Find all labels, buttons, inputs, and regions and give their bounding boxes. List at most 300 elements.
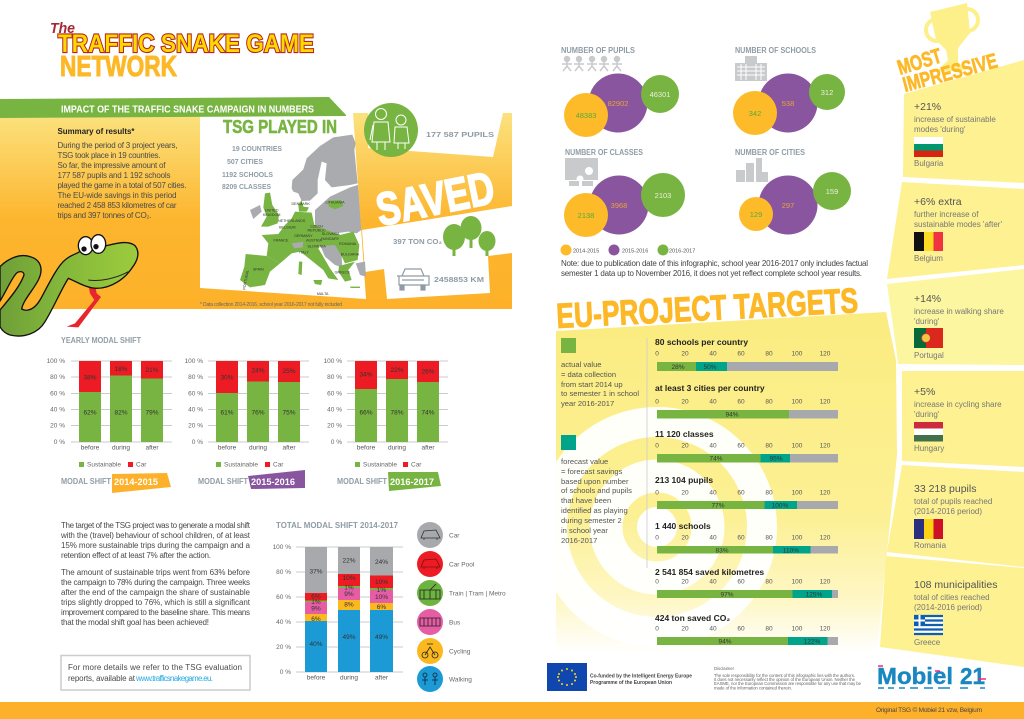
chart: modal shift 2016-2017: 0 % (331, 439, 342, 446)
panel: Greece: total of cities reached (914, 593, 990, 602)
map of Europe: AUSTRIA (306, 239, 322, 243)
label: modal shift 2016-2017: 2016-2017 (390, 477, 434, 487)
chart: modal shift 2015-2016: 76% (251, 410, 265, 416)
bar: at least 3 cities per country: 60 (737, 398, 745, 406)
chart: modal shift 2016-2017: 20 % (327, 422, 342, 430)
label: modal shift 2014-2015: 2014-2015 (114, 477, 158, 487)
bar: at least 3 cities per country: 20 (681, 398, 689, 406)
panel: Belgium: +6% extra (914, 196, 962, 208)
chart: modal shift 2015-2016: 24% (251, 368, 265, 374)
panel: number of classes: 2103 (655, 191, 671, 200)
bar: 80 schools per country: 80 schools per country (655, 337, 748, 347)
legend: actual value (561, 338, 639, 408)
panel: Belgium: further increase of (914, 210, 979, 219)
text block: summary of results: reached 2 458 853 kilometres of car (58, 201, 177, 210)
chart: modal shift 2016-2017: 22% (390, 367, 404, 374)
text block: summary of results: The EU-wide savings in this period (58, 191, 176, 200)
chart: modal shift 2014-2015: Sustainable (87, 462, 121, 468)
stat: km saved: 2458853 KM (434, 275, 484, 284)
chart: modal shift 2016-2017: 60 % (327, 390, 342, 398)
chart: total modal shift: 9% (344, 591, 354, 598)
text: co-funded (590, 674, 692, 686)
legend: school years (560, 244, 695, 256)
map of Europe: NETHERLANDS (278, 219, 306, 223)
bar: 2 541 854 saved kilometres: 20 (681, 578, 689, 586)
text: co-funded: Co-funded by the Intelligent Energy Europe (590, 674, 692, 680)
panel: Hungary (902, 371, 1024, 467)
panel: Romania (887, 465, 1024, 567)
chart: modal shift 2014-2015: 80 % (50, 374, 65, 381)
bar: 424 ton saved CO2: 122% (804, 638, 821, 646)
panel: Greece (880, 556, 1024, 667)
icon: flag of Greece (914, 615, 943, 635)
legend: forecast value (561, 435, 632, 545)
chart: total modal shift: after (375, 674, 389, 682)
legend: actual value: to semester 1 in school (561, 389, 639, 398)
note: publication date: Note: due to publication date of this infographic, school year 2016-2017 only includes factual (561, 259, 868, 268)
bar: 11 120 classes: 60 (737, 442, 745, 450)
bar: 1 440 schools (655, 521, 838, 554)
legend: forecast value: = forecast savings (561, 467, 623, 476)
panel: number of pupils: 48383 (576, 111, 596, 120)
panel: Romania: 33 218 pupils (914, 483, 976, 495)
chart: modal shift 2016-2017: 40 % (327, 406, 342, 414)
map of Europe: LITHUANIA (325, 201, 345, 205)
bar: 424 ton saved CO2: 80 (765, 626, 773, 632)
chart: total modal shift: 6% (311, 616, 321, 623)
chart: modal shift 2014-2015: 21% (145, 367, 159, 374)
map of Europe: ITALY (299, 251, 309, 255)
legend: school years: 2015-2016 (622, 248, 648, 254)
chart: modal shift 2015-2016: 61% (220, 410, 234, 416)
icon: walking mode (417, 666, 472, 692)
label: modal shift 2016-2017: MODAL SHIFT (337, 477, 387, 486)
icon: city skyline (736, 158, 768, 182)
label: modal shift 2016-2017 (337, 472, 441, 491)
chart: total modal shift: 37% (309, 568, 323, 576)
panel: number of schools: 342 (749, 109, 761, 118)
icon: trophy (926, 3, 978, 72)
target bars (647, 337, 838, 646)
stats list: 8209 CLASSES (222, 182, 271, 191)
text: disclaimer: The sole responsibility for the content of this infographic lies with the authors. (714, 673, 855, 678)
legend: actual value: = data collection (561, 370, 616, 379)
heading: most impressive: MOST (895, 45, 945, 80)
chart: total modal shift: 10% (375, 594, 388, 601)
bar: 213 104 pupils: 120 (820, 490, 831, 496)
chart: total modal shift: 49% (342, 634, 356, 641)
chart: modal shift 2016-2017: 26% (421, 368, 435, 376)
icon: flag of Portugal (914, 328, 943, 348)
heading: saved: SAVED (372, 161, 499, 236)
label: modal shift 2014-2015: MODAL SHIFT (61, 477, 111, 486)
panel: Bulgaria: Bulgaria (914, 159, 944, 168)
panel: number of schools: 312 (821, 88, 833, 97)
map of Europe: GREECE (335, 270, 351, 274)
panel: Greece: (2014-2016 period) (914, 603, 982, 612)
text block: project target: The target of the TSG project was to generate a modal shift (61, 521, 251, 530)
bar: 213 104 pupils: 80 (765, 490, 773, 496)
chart: modal shift 2014-2015: 79% (145, 410, 159, 416)
bar: 11 120 classes: 0 (655, 442, 659, 450)
map of Europe: ROMANIA (339, 242, 357, 246)
bar: 2 541 854 saved kilometres: 2 541 854 saved kilometres (655, 567, 764, 577)
text block: summary of results: Summary of results* (58, 127, 135, 136)
chart: modal shift 2016-2017 (324, 358, 448, 468)
bar: 80 schools per country: 120 (820, 350, 831, 358)
chart: modal shift 2015-2016: 60 % (188, 390, 203, 398)
chart: modal shift 2016-2017: 34% (359, 372, 373, 378)
bar: 11 120 classes: 120 (820, 442, 831, 450)
bar: 1 440 schools: 80 (765, 534, 773, 542)
chart: modal shift 2015-2016: 100 % (185, 358, 203, 365)
bar: 424 ton saved CO2: 0 (655, 626, 659, 632)
note: publication date (561, 259, 868, 278)
panel: Hungary: Hungary (914, 444, 944, 453)
chart: modal shift 2014-2015: 20 % (50, 422, 65, 430)
chart: total modal shift: 40 % (276, 619, 291, 626)
bar: 1 440 schools: 20 (681, 534, 689, 542)
bar: 80 schools per country (655, 337, 838, 371)
map of Europe: CZECH (310, 224, 323, 228)
panel: number of cities: 159 (826, 187, 838, 196)
chart: modal shift 2015-2016 (185, 358, 309, 468)
icon: car mode (417, 522, 460, 548)
chart: total modal shift: 80 % (276, 569, 291, 576)
bar: 2 541 854 saved kilometres: 80 (765, 578, 773, 586)
bar: 80 schools per country: 40 (709, 350, 717, 358)
legend: forecast value: of schools and pupils (561, 486, 632, 495)
icon: school building (735, 56, 767, 81)
chart: total modal shift: 20 % (276, 644, 291, 651)
logo: Mobiel 21: Mobiel (877, 663, 953, 689)
bar: 2 541 854 saved kilometres: 100 (792, 578, 803, 586)
bar: 213 104 pupils: 60 (737, 490, 745, 496)
bar: 11 120 classes: 95% (769, 456, 783, 462)
chart: modal shift 2014-2015: 40 % (50, 406, 65, 414)
chart: total modal shift: 10% (342, 575, 356, 582)
icon: paper-chain children (562, 56, 622, 71)
panel: Portugal (887, 269, 1024, 365)
text: disclaimer: EASME, nor the European Commission are responsible for any use that may be (714, 681, 862, 686)
stats list: 1192 SCHOOLS (222, 170, 273, 179)
chart: modal shift 2014-2015: 100 % (47, 358, 65, 365)
chart: total modal shift: 1% (311, 599, 321, 606)
chart: modal shift 2016-2017: 80 % (327, 374, 342, 381)
bar: 2 541 854 saved kilometres: 120 (820, 578, 831, 586)
panel: number of classes (564, 148, 685, 237)
panel: number of schools: NUMBER OF SCHOOLS (735, 46, 817, 55)
bar: at least 3 cities per country: at least 3 cities per country (655, 383, 765, 393)
snake illustration (0, 235, 138, 336)
chart: total modal shift: 0 % (280, 669, 291, 676)
legend: forecast value: during semester 2 (561, 516, 622, 525)
chart: modal shift 2016-2017: Sustainable (363, 462, 397, 468)
chart: modal shift 2016-2017: 100 % (324, 358, 342, 365)
panel: number of pupils: 82902 (608, 99, 628, 108)
label: modal shift 2015-2016: 2015-2016 (251, 477, 295, 487)
map of Europe: DENMARK (292, 202, 310, 206)
chart: total modal shift: 6% (377, 604, 386, 611)
bar: 80 schools per country: 28% (671, 364, 685, 371)
map of Europe: UNITED (265, 209, 279, 213)
chart: modal shift 2015-2016: Sustainable (224, 462, 258, 468)
bar: 1 440 schools: 1 440 schools (655, 521, 711, 531)
chart: modal shift 2015-2016: 80 % (188, 374, 203, 381)
bar: 424 ton saved CO2 (655, 613, 838, 646)
bar: 11 120 classes: 11 120 classes (655, 429, 714, 439)
bar: 424 ton saved CO2: 20 (681, 626, 689, 632)
chart: modal shift 2014-2015: Car (136, 462, 147, 468)
chart: modal shift 2016-2017: 66% (359, 410, 373, 416)
bar: at least 3 cities per country: 40 (709, 398, 717, 406)
panel: Bulgaria: increase of sustainable (914, 115, 996, 124)
map of Europe: BULGARIA (341, 253, 360, 257)
bar: 1 440 schools: 40 (709, 534, 717, 542)
chart: modal shift 2016-2017: after (421, 444, 435, 452)
chart: total modal shift: 49% (375, 634, 388, 641)
stats list: 507 CITIES (227, 157, 263, 166)
bar: at least 3 cities per country: 94% (725, 412, 739, 418)
legend: school years: 2016-2017 (669, 248, 695, 254)
icon: classroom (565, 158, 598, 186)
bar: 213 104 pupils: 40 (709, 490, 717, 496)
icon: train mode (417, 580, 506, 606)
chart: total modal shift: before (307, 674, 326, 682)
icon: car mode: Car (449, 532, 460, 540)
bar: 213 104 pupils: 0 (655, 490, 659, 496)
panel: Portugal: +14% (914, 293, 941, 305)
bar: 213 104 pupils: 213 104 pupils (655, 475, 713, 485)
bar: 2 541 854 saved kilometres: 125% (806, 592, 823, 598)
legend: school years: 2014-2015 (573, 248, 599, 254)
label: modal shift 2015-2016 (198, 470, 305, 489)
bar: 424 ton saved CO2: 424 ton saved CO₂ (655, 613, 730, 623)
title: The (50, 20, 75, 37)
icon: flag of Bulgaria (914, 137, 943, 157)
text block: summary of results: played the game in a total of 507 cities. (58, 181, 186, 190)
chart: modal shift 2014-2015: 62% (83, 410, 97, 416)
panel: Greece: Greece (914, 638, 941, 647)
icon: pupils in green circle (364, 103, 418, 157)
chart: total modal shift: 1% (344, 584, 354, 592)
chart: total modal shift (273, 544, 403, 682)
bar: 80 schools per country: 60 (737, 350, 745, 358)
legend: forecast value: 2016-2017 (561, 536, 597, 545)
chart: modal shift 2016-2017: Car (411, 462, 422, 468)
text block: project target (60, 521, 251, 627)
map of Europe: SLOVENIA (308, 245, 326, 249)
panel: Hungary: increase in cycling share (914, 400, 1002, 409)
icon: EU flag (547, 663, 587, 691)
chart: modal shift 2014-2015: 38% (83, 374, 97, 382)
text block: project target: 15% more sustainable trips during the campaign and a (61, 541, 251, 550)
chart: modal shift 2015-2016: Car (273, 462, 284, 468)
text: disclaimer (714, 666, 862, 690)
map of Europe (240, 135, 366, 296)
heading: TSG played in: TSG PLAYED IN (223, 117, 337, 137)
chart: total modal shift: 40% (309, 641, 323, 648)
icon: car pool mode (417, 551, 475, 577)
legend: forecast value: that have been (561, 496, 611, 505)
panel: number of classes: 2138 (578, 211, 594, 220)
map of Europe: SPAIN (253, 267, 264, 271)
bar: 2 541 854 saved kilometres: 60 (737, 578, 745, 586)
text block: project target: improvement compared to the baseline share. This means (61, 608, 250, 617)
chart: modal shift 2015-2016: 25% (282, 368, 296, 375)
chart: total modal shift: 24% (375, 559, 388, 566)
panel: number of schools (733, 46, 845, 135)
icon: flag of Belgium (914, 232, 943, 251)
text block: project target: that the modal shift goal has been achieved! (61, 618, 209, 627)
chart: modal shift 2015-2016: 0 % (192, 439, 203, 446)
bottom band (0, 702, 1024, 719)
panel: Bulgaria: +21% (914, 101, 941, 113)
panel: Belgium (887, 182, 1024, 279)
chart: modal shift 2014-2015: 60 % (50, 390, 65, 398)
legend: forecast value: identified as playing (561, 506, 628, 515)
panel: number of cities: NUMBER OF CITIES (735, 148, 806, 157)
text block: summary of results (58, 127, 186, 220)
heading: EU-project targets: EU-PROJECT TARGETS (555, 281, 859, 336)
text: disclaimer: It does not necessarily reflect the opinion of the European Union. Neither the (714, 677, 856, 682)
bar: 80 schools per country: 0 (655, 350, 659, 358)
heading: total modal shift: TOTAL MODAL SHIFT 2014-2017 (276, 520, 398, 530)
icon: bus mode: Bus (449, 620, 461, 626)
chart: modal shift 2015-2016: 40 % (188, 406, 203, 414)
chart: modal shift 2014-2015: 0 % (54, 439, 65, 446)
text block: summary of results: During the period of 3 project years, (58, 141, 178, 150)
bar: 80 schools per country: 80 (765, 350, 773, 358)
icon: car (397, 269, 429, 290)
bar: 80 schools per country: 100 (792, 350, 803, 358)
heading: yearly modal shift: YEARLY MODAL SHIFT (61, 336, 141, 345)
panel: Portugal: 'during' (914, 317, 940, 326)
logo: Mobiel 21: 21 (960, 663, 985, 689)
callout: more details: For more details we refer to the TSG evaluation (68, 663, 242, 672)
text block: summary of results: So far, the impressive amount of (58, 161, 166, 170)
title (50, 20, 314, 83)
chart: modal shift 2014-2015: before (81, 444, 100, 452)
chart: modal shift 2015-2016: 20 % (188, 422, 203, 430)
bar: 80 schools per country: 50% (703, 364, 717, 371)
icon: bus mode (417, 609, 461, 635)
bar: 424 ton saved CO2: 100 (792, 626, 803, 632)
bar: 1 440 schools: 60 (737, 534, 745, 542)
text block: project target: trips slightly dropped to 76%, which is still a significant (61, 598, 251, 607)
chart: modal shift 2015-2016: during (249, 444, 267, 452)
text: disclaimer: made of the information contained therein. (714, 686, 792, 690)
stats list: 19 COUNTRIES (232, 144, 282, 153)
text block: project target: after the end of the campaign the share of sustainable (61, 588, 251, 597)
icon: flag of Hungary (914, 422, 943, 442)
panel: number of schools: 538 (782, 99, 794, 108)
panel: Hungary: 'during' (914, 410, 940, 419)
panel: number of cities: 129 (750, 210, 762, 219)
map of Europe: FRANCE (273, 239, 289, 243)
panel: Greece: 108 municipalities (914, 579, 997, 591)
label: modal shift 2015-2016: MODAL SHIFT (198, 477, 248, 486)
text block: project target: the campaign to 78% during the campaign. Three weeks (61, 578, 250, 587)
chart: modal shift 2016-2017: 78% (390, 410, 404, 416)
chart: modal shift 2015-2016: 30% (220, 374, 234, 382)
bar: 80 schools per country: 20 (681, 350, 689, 358)
bar: 11 120 classes: 100 (792, 442, 803, 450)
footnote: * Data collection 2014-2016, school year 2016-2017 not fully included (200, 302, 342, 308)
callout: more details (61, 656, 250, 690)
title: NETWORK (60, 51, 177, 83)
bar: at least 3 cities per country: 120 (820, 398, 831, 406)
bar: 213 104 pupils: 20 (681, 490, 689, 496)
callout: more details: www.trafficsnakegame.eu. (135, 674, 213, 683)
chart: modal shift 2014-2015: after (145, 444, 159, 452)
stat: CO2 saved: 397 TON CO₂ (393, 237, 442, 246)
map of Europe: KINGDOM (263, 213, 280, 217)
legend: forecast value: forecast value (561, 457, 608, 466)
panel: Bulgaria: modes 'during' (914, 125, 966, 134)
bar: 11 120 classes: 40 (709, 442, 717, 450)
panel: number of classes: 3968 (611, 201, 627, 210)
bar: 11 120 classes: 74% (709, 456, 723, 462)
text block: summary of results: trips and 397 tonnes of CO₂. (58, 211, 152, 220)
bar: 2 541 854 saved kilometres: 97% (720, 592, 734, 598)
text block: summary of results: TSG took place in 19 countries. (58, 151, 160, 160)
chart: total modal shift: 8% (344, 602, 354, 608)
chart: total modal shift: 1% (377, 587, 386, 594)
bar: at least 3 cities per country: 80 (765, 398, 773, 406)
bar: 213 104 pupils (655, 475, 838, 510)
panel: number of cities: 297 (782, 201, 794, 210)
bar: 424 ton saved CO2: 40 (709, 626, 717, 632)
icon: cycling mode (417, 638, 471, 664)
icon: walking mode: Walking (449, 676, 472, 684)
bar: at least 3 cities per country: 0 (655, 398, 659, 406)
icon: trees (443, 216, 496, 256)
panel: number of pupils: 46301 (650, 90, 670, 99)
map of Europe: PORTUGAL (242, 270, 250, 290)
panel: Romania: Romania (914, 541, 947, 550)
chart: total modal shift: 100 % (273, 544, 291, 551)
chart: modal shift 2014-2015: 82% (114, 410, 128, 416)
legend: actual value: from start 2014 up (561, 380, 623, 389)
panel: Hungary: +5% (914, 386, 935, 398)
stat: pupils: 177 587 PUPILS (426, 130, 494, 139)
bar: 2 541 854 saved kilometres (655, 567, 838, 598)
bar: 213 104 pupils: 77% (711, 502, 725, 510)
bar: at least 3 cities per country: 100 (792, 398, 803, 406)
panel: Portugal: Portugal (914, 351, 944, 360)
text: co-funded: Programme of the European Union (590, 680, 673, 686)
panel: Bulgaria (903, 60, 1024, 183)
bottom band: Original TSG © Mobiel 21 vzw, Belgium (876, 706, 982, 714)
panel: Belgium: sustainable modes 'after' (914, 220, 1002, 229)
map of Europe: GERMANY (294, 234, 313, 238)
text block: project target: retention effect of at least 7% after the action. (61, 551, 211, 560)
bar: 1 440 schools: 0 (655, 534, 659, 542)
logo: Mobiel 21 (877, 663, 986, 689)
chart: total modal shift: during (340, 674, 358, 682)
map of Europe: MALTA (317, 292, 329, 296)
bar: 1 440 schools: 100 (792, 534, 803, 542)
panel: number of classes: NUMBER OF CLASSES (565, 148, 644, 157)
bar: 424 ton saved CO2: 120 (820, 626, 831, 632)
bar: 1 440 schools: 120 (820, 534, 831, 542)
chart: total modal shift: 60 % (276, 594, 291, 601)
chart: total modal shift: 6% (311, 594, 321, 600)
banner: impact heading: IMPACT OF THE TRAFFIC SNAKE CAMPAIGN IN NUMBERS (61, 104, 314, 116)
panel: Romania: total of pupils reached (914, 497, 992, 506)
chart: modal shift 2016-2017: 74% (421, 410, 435, 416)
